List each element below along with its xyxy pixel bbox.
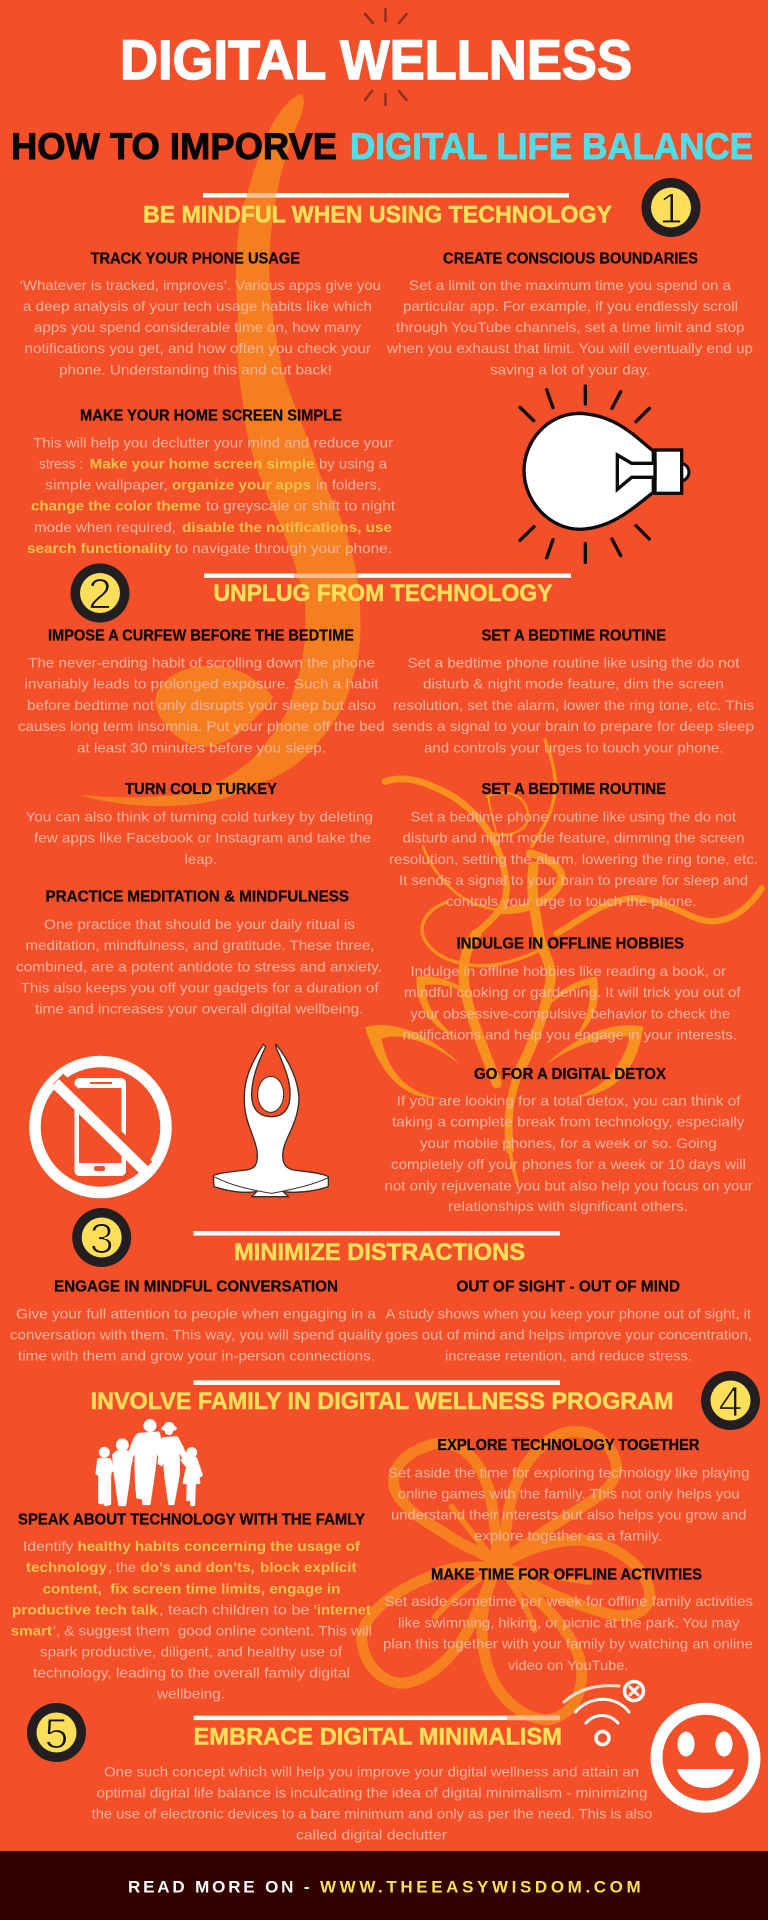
section 2	[16, 564, 758, 1214]
block: speak about technology	[11, 1511, 372, 1702]
title: DIGITAL WELLNESS	[120, 28, 632, 91]
block: set a bedtime routine (first): resolution, set the alarm, lower the ring tone, etc. This	[393, 697, 754, 713]
block: indulge in offline hobbies: Indulge in offline hobbies like reading a book, or	[410, 963, 726, 979]
block: go for a digital detox: not only rejuvenate you but also help you focus on your	[384, 1177, 753, 1193]
section 2 heading: UNPLUG FROM TECHNOLOGY	[214, 580, 552, 607]
block: speak about technology: , the	[108, 1559, 136, 1575]
background flourish: lotus plant	[365, 740, 762, 1183]
block: make your home screen simple: mode when required,	[34, 519, 176, 535]
block: create conscious boundaries: particular app. For example, if you endlessly scroll	[403, 298, 738, 314]
block: speak about technology: block explicit	[260, 1559, 357, 1575]
block: turn cold turkey: You can also think of turning cold turkey by deleting	[26, 809, 373, 825]
badge 1: 1	[659, 185, 683, 233]
block: practice meditation	[16, 889, 382, 1016]
block: speak about technology: Identify	[23, 1538, 74, 1554]
block: create conscious boundaries	[386, 250, 753, 377]
block: make time for offline activities: plan this together with your family by watching an online	[383, 1636, 753, 1652]
block: explore technology together: understand their interests but also helps you grow and	[391, 1507, 746, 1523]
block: go for a digital detox: completely off your phones for a week or 10 days will	[391, 1156, 746, 1172]
block: speak about technology: 'internet	[314, 1601, 371, 1617]
background flourish: treble curve	[80, 94, 361, 806]
block: create conscious boundaries: when you exhaust that limit. You will eventually end up	[386, 340, 753, 356]
badge 4: 4	[719, 1378, 742, 1426]
block: speak about technology: technology, leading to the overall family digital	[33, 1665, 350, 1681]
block: turn cold turkey: few apps like Facebook or Instagram and take the	[34, 830, 371, 846]
block: make your home screen simple: stress :	[39, 455, 83, 471]
section 1	[20, 178, 753, 562]
icon: meditation figure	[213, 1044, 328, 1197]
footer link text: WWW.THEEASYWISDOM.COM	[320, 1878, 641, 1897]
block: out of sight: increase retention, and reduce stress.	[445, 1348, 692, 1364]
block: make time for offline activities: video on YouTube.	[508, 1657, 628, 1673]
icon: wifi off	[564, 1682, 644, 1744]
block: digital minimalism text	[92, 1763, 653, 1843]
block: make your home screen simple: search functionality	[27, 540, 172, 556]
badge 3: 3	[90, 1215, 114, 1263]
block: track your phone usage: ‘Whatever is tracked, improves’. Various apps give you	[20, 277, 381, 293]
block: digital minimalism text: the use of electronic devices to a bare minimum and only as per the need. This is also	[92, 1806, 653, 1822]
block: make time for offline activities	[383, 1566, 753, 1673]
block: indulge in offline hobbies: notifications and help you engage in your interests.	[403, 1027, 737, 1043]
block: mindful conversation: ENGAGE IN MINDFUL CONVERSATION	[54, 1278, 338, 1295]
block: set a bedtime routine (first): sends a signal to your brain to prepare for deep sleep	[392, 718, 754, 734]
block: make your home screen simple: simple wallpaper,	[45, 477, 168, 493]
block: set a bedtime routine (second): It sends a signal to your brain to preare for sleep and	[399, 872, 748, 888]
block: track your phone usage: phone. Understanding this and cut back!	[59, 361, 332, 377]
subtitle: DIGITAL LIFE BALANCE	[350, 126, 753, 167]
block: mindful conversation: conversation with them. This way, you will spend quality	[10, 1327, 382, 1343]
block: track your phone usage: apps you spend considerable time on, how many	[34, 319, 361, 335]
block: digital minimalism text: One such concept which will help you improve your digital wellness and attain an	[104, 1763, 639, 1779]
block: set a bedtime routine (first): disturb & night mode feature, dim the screen	[423, 676, 724, 692]
block: digital minimalism text: optimal digital life balance is inculcating the idea of digital minimalism - minimizing	[96, 1784, 648, 1800]
block: speak about technology: SPEAK ABOUT TECHNOLOGY WITH THE FAMLY	[18, 1511, 365, 1528]
block: set a bedtime routine (second): disturb and night mode feature, dimming the screen	[403, 830, 745, 846]
block: explore technology together: online games with the family. This not only helps you	[398, 1485, 740, 1501]
icon: smiley	[656, 1709, 754, 1807]
block: out of sight: A study shows when you keep your phone out of sight, it	[386, 1305, 751, 1321]
block: track your phone usage: TRACK YOUR PHONE USAGE	[91, 250, 300, 267]
block: explore technology together	[388, 1437, 749, 1544]
block: impose a curfew: invariably leads to prolonged exposure. Such a habit	[24, 676, 379, 692]
header sparks	[365, 9, 406, 105]
block: speak about technology: content, fix screen time limits, engage in	[43, 1580, 340, 1596]
block: make time for offline activities: Set aside sometime per week for offline family activities	[384, 1593, 753, 1609]
subtitle	[11, 126, 753, 167]
badge 2	[70, 564, 130, 622]
block: turn cold turkey	[26, 781, 373, 867]
block: impose a curfew: causes long term insomnia. Put your phone off the bed	[18, 718, 384, 734]
block: practice meditation: PRACTICE MEDITATION & MINDFULNESS	[46, 889, 349, 906]
block: impose a curfew: at least 30 minutes before you sleep.	[77, 739, 326, 755]
block: create conscious boundaries: Set a limit on the maximum time you spend on a	[409, 277, 731, 293]
block: set a bedtime routine (second)	[389, 781, 758, 909]
block: set a bedtime routine (second): resolution, setting the alarm, lowering the ring tone, etc.	[389, 851, 758, 867]
block: go for a digital detox: GO FOR A DIGITAL DETOX	[474, 1066, 666, 1083]
block: explore technology together: explore together as a family.	[474, 1528, 662, 1544]
section 3	[10, 1208, 752, 1364]
section 3 heading: MINIMIZE DISTRACTIONS	[234, 1239, 525, 1266]
block: make your home screen simple: to navigate through your phone.	[175, 540, 392, 556]
block: go for a digital detox: relationships with significant others.	[448, 1198, 688, 1214]
block: practice meditation: time and increases your overall digital wellbeing.	[35, 1000, 363, 1016]
badge 5	[27, 1703, 86, 1762]
block: make your home screen simple: by using a	[319, 455, 387, 471]
badge 5: 5	[45, 1710, 68, 1758]
block: impose a curfew: before bedtime not only disrupts your sleep but also	[27, 697, 376, 713]
block: speak about technology: ', & suggest them good online content. This will	[53, 1622, 372, 1638]
footer link text: READ MORE ON -	[128, 1878, 310, 1897]
block: track your phone usage: notifications you get, and how often you check your	[24, 340, 371, 356]
block: indulge in offline hobbies: your obsessive-compulsive behavior to check the	[410, 1005, 730, 1021]
block: impose a curfew: The never-ending habit of scrolling down the phone	[28, 655, 375, 671]
block: impose a curfew	[18, 628, 384, 755]
footer link text	[128, 1878, 641, 1897]
block: make your home screen simple: This will help you declutter your mind and reduce your	[33, 434, 393, 450]
block: make time for offline activities: like swimming, hiking, or picnic at the park. You may	[398, 1615, 740, 1631]
block: set a bedtime routine (second): SET A BEDTIME ROUTINE	[482, 781, 666, 798]
block: create conscious boundaries: through YouTube channels, set a time limit and stop	[396, 319, 745, 335]
block: speak about technology: do’s and don’ts,	[141, 1559, 255, 1575]
badge 4	[701, 1371, 760, 1430]
block: create conscious boundaries: saving a lot of your day.	[490, 361, 650, 377]
block: digital minimalism text: called digital declutter	[296, 1827, 447, 1843]
block: make your home screen simple: MAKE YOUR HOME SCREEN SIMPLE	[80, 408, 342, 425]
block: out of sight: goes out of mind and helps improve your concentration,	[386, 1327, 752, 1343]
block: mindful conversation	[10, 1278, 382, 1364]
block: practice meditation: This also keeps you off your gadgets for a duration of	[21, 979, 379, 995]
block: make your home screen simple: to greyscale or shift to night	[206, 498, 395, 514]
block: go for a digital detox: your mobile phones, for a week or so. Going	[420, 1135, 717, 1151]
block: set a bedtime routine (first): SET A BEDTIME ROUTINE	[482, 628, 666, 645]
block: speak about technology: , teach children to be	[159, 1601, 310, 1617]
block: make your home screen simple	[27, 408, 395, 556]
badge 2: 2	[88, 570, 112, 618]
subtitle: HOW TO IMPORVE	[11, 126, 337, 167]
icon: family silhouette	[97, 1420, 202, 1505]
block: explore technology together: Set aside the time for exploring technology like playing	[388, 1464, 749, 1480]
block: mindful conversation: Give your full attention to people when engaging in a	[16, 1305, 376, 1321]
block: indulge in offline hobbies	[403, 935, 741, 1043]
block: set a bedtime routine (second): controls your urge to touch the phone.	[446, 893, 696, 909]
block: go for a digital detox	[384, 1066, 753, 1214]
block: make your home screen simple: in folders,	[316, 477, 381, 493]
block: speak about technology: spark productive, diligent, and healthy use of	[40, 1644, 342, 1660]
section 5 heading: EMBRACE DIGITAL MINIMALISM	[194, 1723, 562, 1750]
block: make your home screen simple: Make your home screen simple	[90, 455, 315, 471]
block: speak about technology: wellbeing.	[156, 1686, 225, 1702]
block: practice meditation: meditation, mindfulness, and gratitude. These three,	[26, 937, 374, 953]
block: impose a curfew: IMPOSE A CURFEW BEFORE THE BEDTIME	[48, 628, 354, 645]
section 4 heading: INVOLVE FAMILY IN DIGITAL WELLNESS PROGRAM	[91, 1388, 674, 1415]
block: make your home screen simple: disable the notifications, use	[182, 519, 392, 535]
block: create conscious boundaries: CREATE CONSCIOUS BOUNDARIES	[443, 250, 698, 267]
block: mindful conversation: time with them and grow your in-person connections.	[18, 1348, 375, 1364]
block: practice meditation: combined, are a potent antidote to stress and anxiety.	[16, 958, 382, 974]
icon: light bulb	[520, 386, 689, 562]
block: explore technology together: EXPLORE TECHNOLOGY TOGETHER	[437, 1437, 700, 1454]
block: speak about technology: healthy habits concerning the usage of	[77, 1538, 360, 1554]
block: make your home screen simple: organize your apps	[172, 477, 311, 493]
block: turn cold turkey: TURN COLD TURKEY	[125, 781, 277, 798]
block: set a bedtime routine (first): Set a bedtime phone routine like using the do not	[408, 655, 740, 671]
section 5	[27, 1682, 754, 1843]
badge 3	[72, 1208, 131, 1267]
block: out of sight: OUT OF SIGHT - OUT OF MIND	[456, 1278, 680, 1295]
block: speak about technology: smart	[11, 1622, 52, 1638]
block: make time for offline activities: MAKE TIME FOR OFFLINE ACTIVITIES	[431, 1566, 702, 1583]
icon: no phone	[35, 1062, 166, 1192]
block: set a bedtime routine (first)	[392, 628, 754, 755]
block: turn cold turkey: leap.	[185, 851, 217, 867]
section 1 heading: BE MINDFUL WHEN USING TECHNOLOGY	[143, 202, 612, 228]
background flourish: looped flower	[362, 1432, 650, 1720]
block: out of sight	[386, 1278, 752, 1364]
block: speak about technology: technology	[26, 1559, 107, 1575]
block: go for a digital detox: If you are looking for a total detox, you can think of	[397, 1093, 741, 1109]
block: indulge in offline hobbies: INDULGE IN OFFLINE HOBBIES	[456, 935, 684, 952]
block: track your phone usage: a deep analysis of your tech usage habits like which	[23, 298, 372, 314]
block: track your phone usage	[20, 250, 381, 377]
block: make your home screen simple: change the color theme	[31, 498, 201, 514]
footer	[0, 1851, 768, 1920]
badge 1	[642, 178, 700, 237]
block: go for a digital detox: taking a complete break from technology, especially	[392, 1114, 744, 1130]
block: speak about technology: productive tech talk	[12, 1601, 158, 1617]
block: practice meditation: One practice that should be your daily ritual is	[44, 916, 355, 932]
block: set a bedtime routine (second): Set a bedtime phone routine like using the do not	[410, 809, 736, 825]
block: indulge in offline hobbies: mindful cooking or gardening. It will trick you out of	[404, 984, 741, 1000]
block: set a bedtime routine (first): and controls your urges to touch your phone.	[424, 739, 724, 755]
section 4	[11, 1371, 760, 1702]
